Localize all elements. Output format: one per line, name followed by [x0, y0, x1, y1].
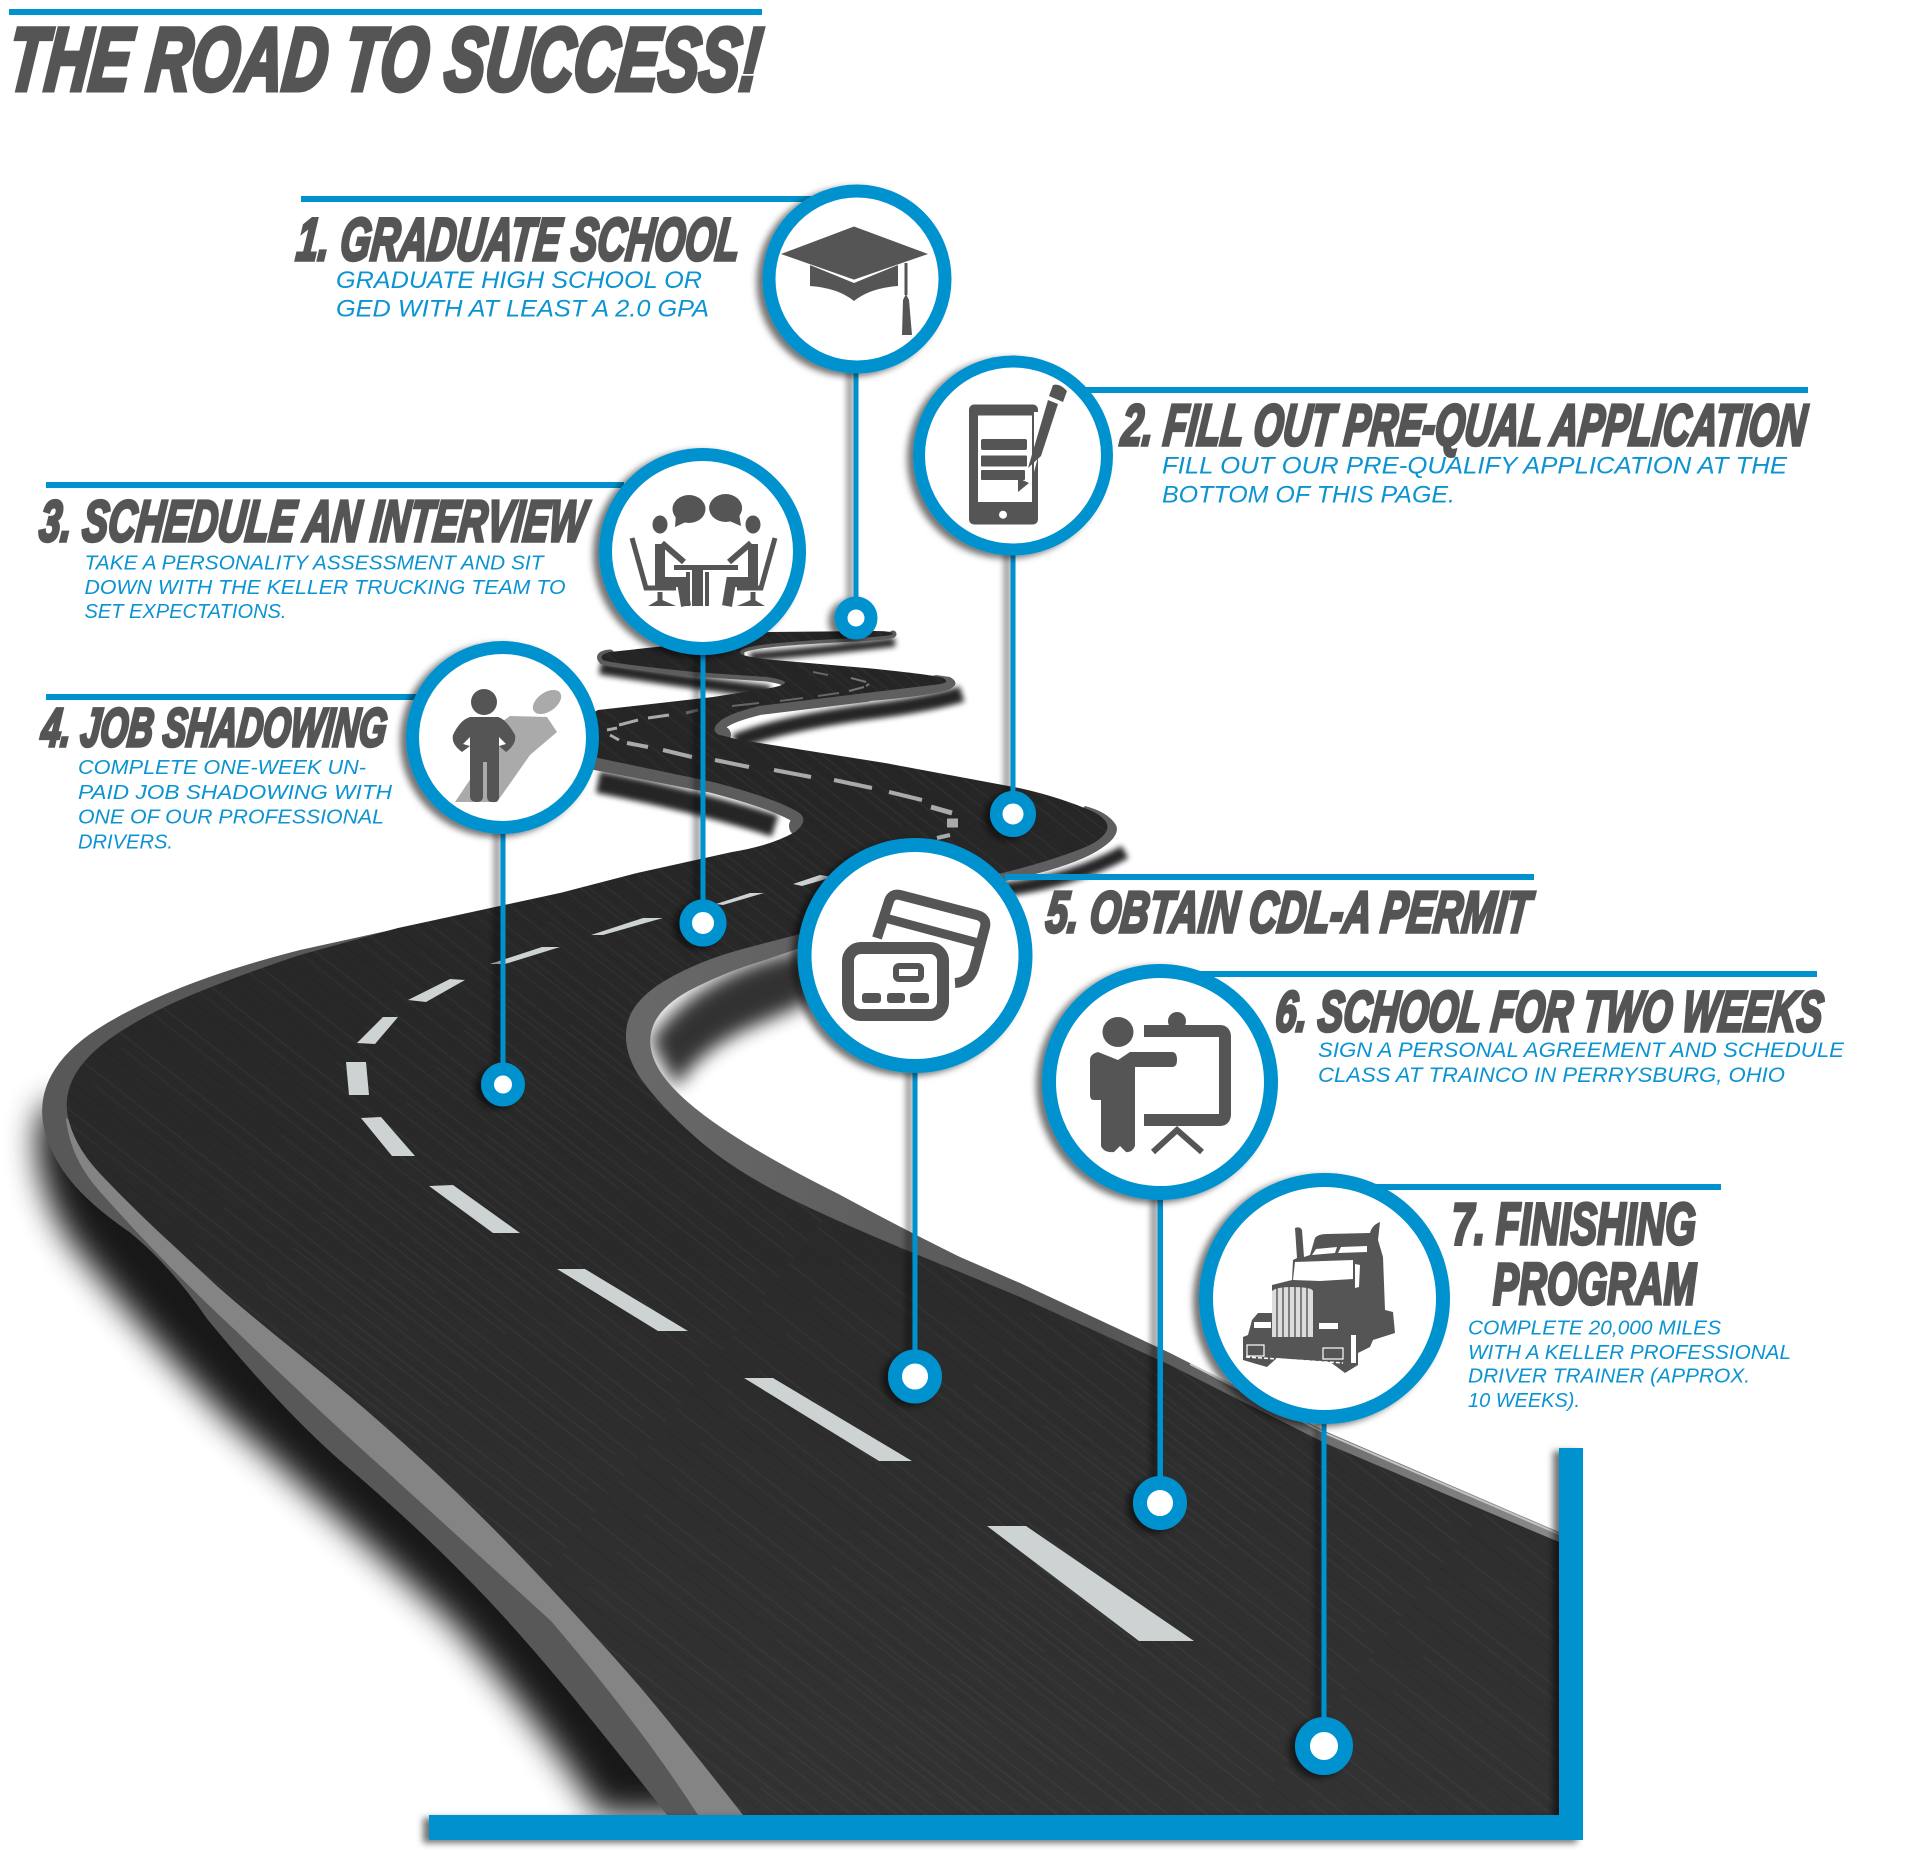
curb: outer left dark band	[42, 893, 698, 1815]
step 7 heading: 7. FINISHING	[1452, 1192, 1696, 1257]
step 2 text: FILL OUT OUR PRE-QUALIFY APPLICATION AT THE	[1162, 452, 1788, 480]
step 3 text: SET EXPECTATIONS.	[84, 601, 286, 623]
title	[4, 9, 766, 109]
icon: teacher at board	[1090, 1012, 1225, 1152]
step 7 text: COMPLETE 20,000 MILES	[1468, 1318, 1722, 1340]
step 1 circle	[769, 191, 945, 367]
step 1 text: GRADUATE HIGH SCHOOL OR	[336, 267, 702, 294]
step 2: fill out pre-qual application	[919, 362, 1810, 831]
step 4 text: COMPLETE ONE-WEEK UN-	[78, 757, 366, 779]
step 1 text: GED WITH AT LEAST A 2.0 GPA	[336, 296, 709, 323]
step 4: job shadowing	[38, 648, 592, 1100]
step 4 text: PAID JOB SHADOWING WITH	[78, 782, 393, 804]
step 4 text: DRIVERS.	[78, 832, 173, 854]
step 2 circle	[919, 362, 1107, 550]
icon: interview	[632, 494, 775, 606]
step 4 rule	[46, 694, 418, 700]
step 7: finishing program	[1206, 1180, 1791, 1768]
step 1 rule	[301, 196, 811, 202]
icon: person with shadow	[453, 685, 566, 802]
step 7 text: DRIVER TRAINER (APPROX.	[1468, 1366, 1750, 1388]
curb: right hairpin tip	[1000, 806, 1117, 882]
step 4 circle	[412, 648, 592, 828]
curb: upper bends	[590, 634, 893, 826]
step 4 heading: 4. JOB SHADOWING	[38, 698, 390, 758]
icon: semi truck	[1243, 1222, 1395, 1373]
icon: graduation cap	[781, 226, 928, 335]
step 5 rule	[1005, 874, 1534, 880]
asphalt surface	[0, 600, 1600, 1815]
road shadow: inner curve	[650, 948, 810, 1088]
step 7 connector and pin	[1302, 1415, 1346, 1768]
step 6: school for two weeks	[1049, 971, 1845, 1523]
step 6 circle	[1049, 971, 1271, 1193]
curb: upper hairpin tip	[870, 675, 956, 702]
step 2 rule	[1085, 387, 1808, 393]
step 1 connector and pin	[841, 360, 871, 633]
step 5: obtain cdl-a permit	[804, 845, 1537, 1396]
step 2 connector and pin	[996, 545, 1030, 831]
step 5 heading: 5. OBTAIN CDL-A PERMIT	[1043, 880, 1537, 945]
step 3 connector and pin	[686, 640, 720, 940]
step 1 heading: 1. GRADUATE SCHOOL	[294, 206, 744, 273]
curb: far edge highlight	[1190, 1364, 1559, 1534]
step 7 rule	[1372, 1184, 1721, 1190]
road shadow: upper bends	[598, 642, 1125, 890]
step 4 connector and pin	[488, 825, 518, 1100]
step 4 text: ONE OF OUR PROFESSIONAL	[78, 807, 384, 829]
step 2 text: BOTTOM OF THIS PAGE.	[1162, 481, 1455, 508]
step 3 rule	[46, 482, 624, 488]
curb: inner curve and far edge	[626, 934, 1559, 1542]
step 7 text: WITH A KELLER PROFESSIONAL	[1468, 1342, 1791, 1364]
icon: cards	[848, 895, 985, 1015]
step 5 connector and pin	[895, 1065, 935, 1396]
centre line: foreground dashes	[346, 875, 1194, 1641]
step 1: graduate school	[294, 191, 945, 633]
blue corner frame	[429, 1448, 1583, 1840]
step 3 text: TAKE A PERSONALITY ASSESSMENT AND SIT	[84, 552, 545, 574]
centre line: distant dashes	[607, 672, 958, 838]
step 7 text: 10 WEEKS).	[1468, 1390, 1580, 1412]
step 3 heading: 3. SCHEDULE AN INTERVIEW	[37, 489, 593, 554]
step 7 circle	[1206, 1180, 1443, 1417]
step 3: schedule an interview	[37, 454, 800, 940]
step 6 text: SIGN A PERSONAL AGREEMENT AND SCHEDULE	[1318, 1039, 1845, 1062]
icon: phone and pencil	[969, 385, 1067, 524]
step 3 text: DOWN WITH THE KELLER TRUCKING TEAM TO	[84, 577, 566, 599]
step 3 circle	[606, 454, 800, 648]
step 6 text: CLASS AT TRAINCO IN PERRYSBURG, OHIO	[1318, 1064, 1785, 1087]
step 6 connector and pin	[1140, 1190, 1180, 1523]
curb: outer left light band	[66, 1118, 800, 1815]
step 7 heading: PROGRAM	[1493, 1252, 1697, 1317]
road shadow: outer curve	[37, 1100, 760, 1815]
title: THE ROAD TO SUCCESS!	[4, 9, 766, 109]
winding road	[0, 600, 1600, 1815]
step 6 rule	[1200, 971, 1817, 977]
step 5 circle	[804, 845, 1026, 1066]
